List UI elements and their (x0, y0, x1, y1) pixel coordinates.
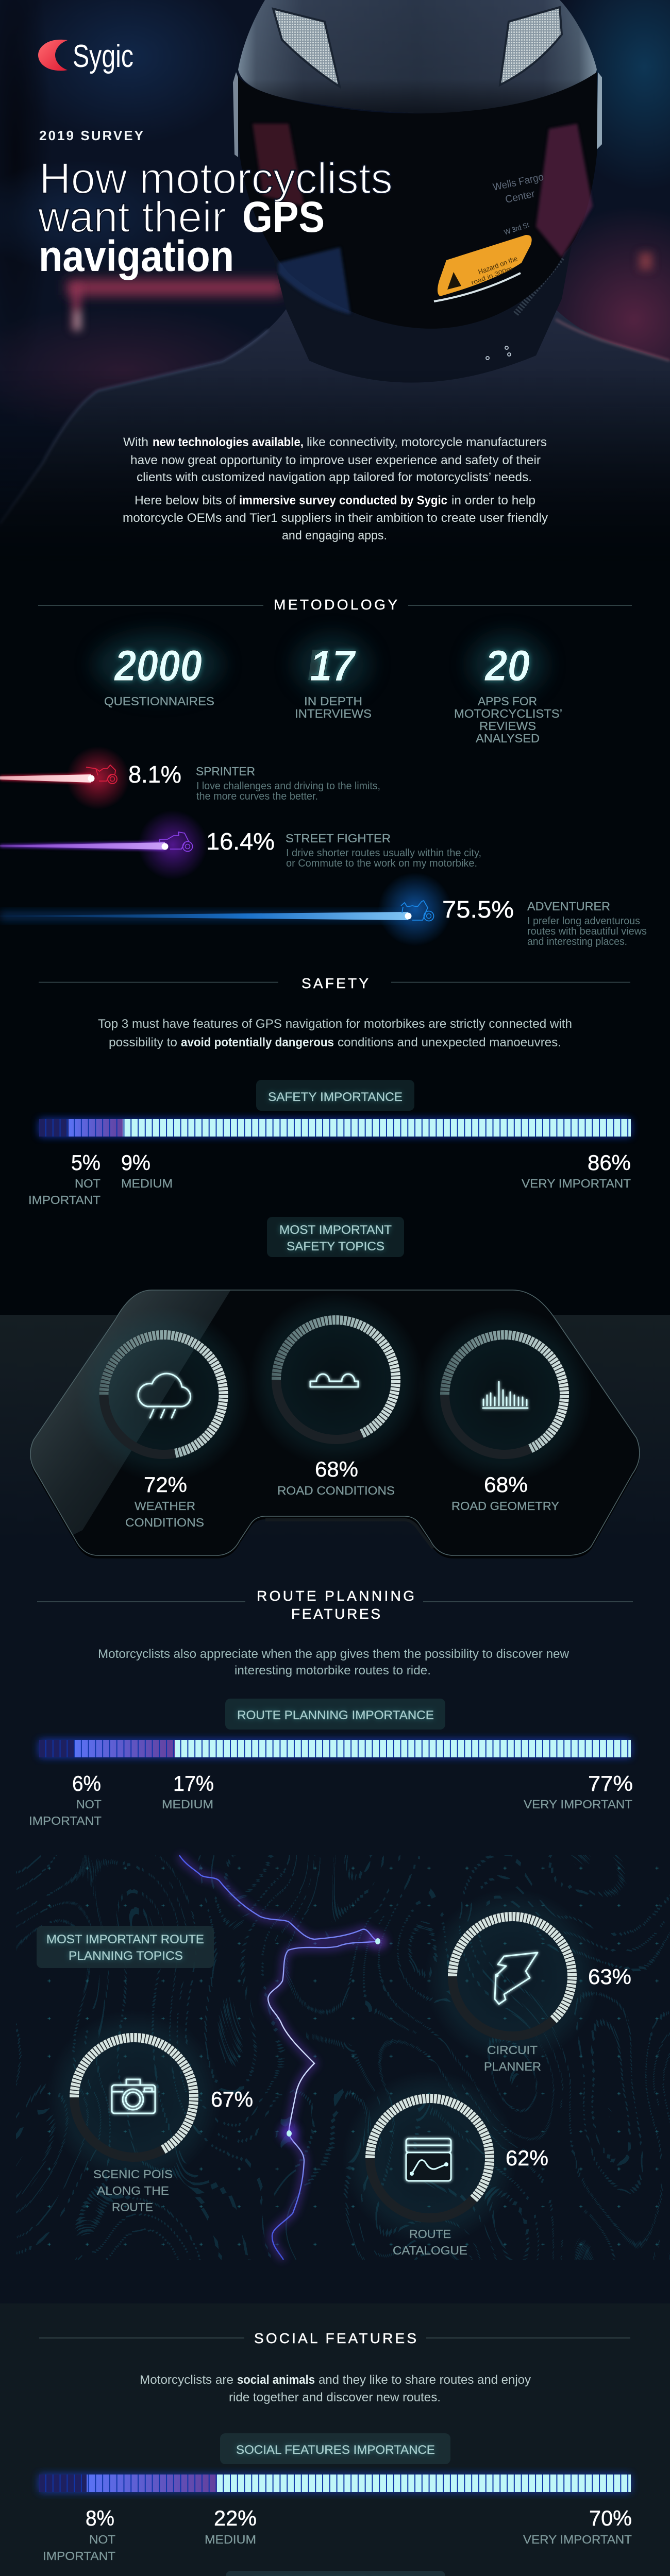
intro text: clients with customized navigation app tailored for motorcyclists’ needs. (137, 470, 532, 484)
rider type: street fighter: or Commute to the work on my motorbike. (286, 858, 477, 869)
gauge: scenic POIs: ROUTE (112, 2200, 153, 2214)
logo: Sygic: Sygic (73, 39, 133, 74)
gauge: road geometry (417, 1307, 592, 1513)
pill: route planning topics: PLANNING TOPICS (69, 1949, 183, 1963)
route values: MEDIUM (162, 1798, 213, 1811)
intro text: With (123, 435, 148, 449)
safety values: 9% (121, 1150, 150, 1175)
intro text (123, 435, 548, 543)
rider type: adventurer: ADVENTURER (527, 900, 610, 913)
stat: 2000 questionnaires (94, 633, 223, 708)
main title: navigation (39, 232, 234, 280)
icon: road bumps (310, 1374, 358, 1387)
bar: safety importance (39, 1119, 631, 1137)
main title: How motorcyclists (39, 154, 393, 202)
rider type: sprinter (0, 746, 380, 810)
route values: VERY IMPORTANT (524, 1798, 632, 1811)
social values: IMPORTANT (43, 2549, 115, 2563)
main title: want their (38, 193, 226, 241)
visor (236, 72, 598, 329)
stat: 17 interviews (294, 634, 372, 720)
stat: 2000 questionnaires: QUESTIONNAIRES (104, 694, 214, 708)
gauge: weather conditions: CONDITIONS (125, 1516, 204, 1529)
heading: route planning: FEATURES (291, 1606, 380, 1622)
pill: safety topics: MOST IMPORTANT (279, 1223, 392, 1237)
neck collar (271, 242, 572, 383)
rider type: adventurer (0, 872, 647, 947)
rider type: sprinter: 8.1% (128, 761, 181, 788)
social intro: ride together and discover new routes. (229, 2391, 441, 2404)
stat: 20 apps (454, 634, 562, 745)
rider type: adventurer: routes with beautiful views (527, 926, 647, 937)
icon: elevation bars (483, 1382, 528, 1408)
main title: GPS (242, 193, 325, 241)
social values: 22% (214, 2506, 257, 2530)
rider type: sprinter: the more curves the better. (196, 791, 318, 802)
social values: VERY IMPORTANT (523, 2533, 632, 2546)
safety intro: conditions and unexpected manoeuvres. (338, 1036, 561, 1049)
rider type: adventurer: and interesting places. (527, 936, 627, 947)
safety intro: possibility to (109, 1036, 177, 1049)
social intro (140, 2373, 531, 2404)
icon: camera (112, 2079, 155, 2113)
pill: route planning importance: ROUTE PLANNING IMPORTANCE (237, 1708, 434, 1722)
gauge: scenic POIs: ALONG THE (97, 2184, 169, 2197)
intro text: Here below bits of (135, 494, 236, 507)
social values (43, 2506, 632, 2563)
stat: 2000 questionnaires: 2000 (113, 641, 202, 690)
icon: sprint bike (86, 765, 115, 781)
safety values: 86% (588, 1150, 631, 1175)
route intro: Motorcyclists also appreciate when the app gives them the possibility to discover new (98, 1647, 569, 1661)
icon: catalogue (406, 2139, 451, 2181)
safety values: MEDIUM (121, 1177, 173, 1190)
safety intro (98, 1017, 572, 1049)
safety intro: avoid potentially dangerous (181, 1036, 334, 1049)
stat: 20 apps: 20 (484, 641, 530, 690)
rider type: sprinter: I love challenges and driving to the limits, (196, 781, 380, 792)
route intro (98, 1647, 569, 1677)
heading: safety: SAFETY (301, 975, 368, 991)
route values: IMPORTANT (29, 1814, 102, 1827)
gauge: route catalogue: CATALOGUE (393, 2244, 467, 2257)
safety values: 5% (71, 1150, 100, 1175)
rider type: street fighter: I drive shorter routes usually within the city, (286, 848, 481, 859)
hero photo: helmeted rider: Hazard on the (477, 254, 518, 276)
gauge: road conditions: ROAD CONDITIONS (277, 1484, 395, 1497)
gauge: weather conditions: WEATHER (135, 1499, 195, 1513)
intro text: in order to help (451, 494, 535, 507)
heading: route planning (37, 1588, 633, 1622)
jacket (0, 309, 670, 567)
gauge: circuit planner: 63% (588, 1964, 631, 1989)
route values: NOT (76, 1798, 102, 1811)
intro text: like connectivity, motorcycle manufacturers (307, 435, 547, 449)
social intro: Motorcyclists are (140, 2373, 233, 2387)
heading: route planning: ROUTE PLANNING (257, 1588, 414, 1604)
route values: 77% (588, 1771, 633, 1795)
social values: NOT (89, 2533, 115, 2546)
hero photo: helmeted rider: Center (504, 188, 536, 206)
social values: 70% (589, 2506, 632, 2530)
rider type: street fighter: 16.4% (206, 828, 275, 855)
collar studs (486, 346, 511, 360)
rider type: street fighter: STREET FIGHTER (286, 832, 391, 845)
gauge: road conditions (248, 1292, 424, 1497)
safety values (28, 1150, 631, 1207)
heading: social features: SOCIAL FEATURES (254, 2330, 416, 2346)
pill: route planning topics: MOST IMPORTANT ROUTE (46, 1933, 204, 1946)
stat: 20 apps: MOTORCYCLISTS’ (454, 707, 562, 720)
social intro: social animals (237, 2373, 315, 2387)
route values: 6% (72, 1771, 101, 1795)
stat: 17 interviews: 17 (310, 641, 356, 690)
gauge: road geometry: 68% (484, 1472, 528, 1497)
safety values: VERY IMPORTANT (522, 1177, 631, 1190)
safety values: NOT (75, 1177, 100, 1190)
stat: 17 interviews: IN DEPTH (304, 694, 362, 708)
pill: safety importance: SAFETY IMPORTANCE (268, 1090, 403, 1104)
rider type: adventurer: 75.5% (442, 896, 514, 923)
rider type: sprinter: SPRINTER (196, 765, 255, 778)
hero photo: helmeted rider (0, 0, 670, 567)
icon: adventure bike (401, 901, 428, 920)
hero photo: helmeted rider: Wells Fargo (492, 172, 545, 193)
pill: social importance (220, 2433, 450, 2464)
hazard sign reflection (438, 235, 532, 296)
pill: route planning topics (37, 1926, 214, 1968)
panel: safety dashboard (21, 1288, 640, 1561)
social values: 8% (86, 2506, 114, 2530)
route values: 17% (173, 1771, 214, 1795)
gauge: scenic POIs (46, 2010, 253, 2214)
gauge: circuit planner: PLANNER (484, 2060, 541, 2073)
heading: methodology: METODOLOGY (274, 597, 397, 613)
intro text: immersive survey conducted by Sygic (239, 494, 447, 507)
stat: 20 apps: APPS FOR (478, 694, 537, 708)
icon: circuit (495, 1953, 538, 2004)
safety intro: Top 3 must have features of GPS navigation for motorbikes are strictly connected with (98, 1017, 572, 1031)
bar: route planning importance (39, 1740, 631, 1757)
gauge: route catalogue: 62% (506, 2146, 548, 2170)
gauge: weather conditions: 72% (144, 1472, 187, 1497)
pill: safety importance (256, 1080, 414, 1111)
pill: social importance: SOCIAL FEATURES IMPORTANCE (236, 2443, 435, 2457)
gauge: scenic POIs: 67% (211, 2087, 253, 2111)
stat: 20 apps: REVIEWS (479, 719, 536, 733)
helmet dome (238, 0, 597, 113)
logo: Sygic (38, 39, 133, 74)
bar: social importance (39, 2475, 631, 2492)
gauge: circuit planner (425, 1889, 631, 2073)
stat: 17 interviews: INTERVIEWS (295, 707, 372, 720)
pill: route planning importance (225, 1699, 445, 1730)
pill: safety topics (267, 1217, 404, 1257)
gauge: circuit planner: CIRCUIT (487, 2043, 538, 2057)
icon: rain cloud (138, 1374, 191, 1418)
intro text: have now great opportunity to improve user experience and safety of their (130, 453, 541, 467)
gauge: road geometry: ROAD GEOMETRY (451, 1499, 559, 1513)
gauge: route catalogue (342, 2071, 548, 2257)
intro text: new technologies available, (153, 435, 304, 449)
pill: safety topics: SAFETY TOPICS (287, 1240, 384, 1253)
gauge: route catalogue: ROUTE (409, 2227, 451, 2241)
hero photo: helmeted rider: W 3rd St (503, 221, 530, 236)
hero photo: helmeted rider: road in 300m (470, 265, 513, 286)
social intro: and they like to share routes and enjoy (319, 2373, 531, 2387)
social values: MEDIUM (205, 2533, 256, 2546)
map: topographic contours and route (16, 1855, 670, 2260)
rider type: adventurer: I prefer long adventurous (527, 916, 640, 927)
stat: 20 apps: ANALYSED (476, 732, 540, 745)
gauge: road conditions: 68% (315, 1457, 358, 1481)
icon: street bike (160, 832, 189, 849)
intro text: and engaging apps. (282, 529, 387, 543)
pill: social topics (226, 2571, 445, 2576)
gauge: scenic POIs: SCENIC POIS (93, 2167, 173, 2181)
route intro: interesting motorbike routes to ride. (234, 1664, 431, 1677)
route values (29, 1771, 633, 1827)
intro text: motorcycle OEMs and Tier1 suppliers in their ambition to create user friendly (123, 511, 548, 525)
main title (38, 154, 393, 280)
helmet vents (273, 9, 340, 87)
rider type: street fighter (0, 810, 481, 880)
gauge: weather conditions (76, 1307, 252, 1529)
survey year label: 2019 SURVEY (39, 128, 143, 143)
safety values: IMPORTANT (28, 1193, 100, 1207)
route line (179, 1855, 387, 2260)
